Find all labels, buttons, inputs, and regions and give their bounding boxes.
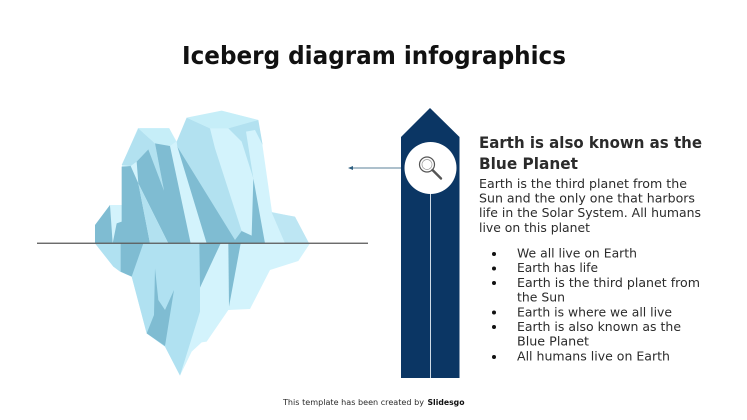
title: Iceberg diagram infographics (182, 41, 566, 70)
description text: live on this planet (479, 220, 590, 235)
bullet list: Blue Planet (517, 334, 589, 348)
footer credit: Slidesgo (428, 398, 465, 407)
bullet list: All humans live on Earth (517, 348, 670, 364)
heading (479, 133, 702, 173)
navy arrow banner (401, 108, 460, 378)
description text (479, 176, 701, 235)
iceberg below water (95, 243, 310, 376)
bullet list (492, 246, 700, 364)
bullet list: Earth is the third planet from (517, 275, 700, 290)
bullet list: the Sun (517, 290, 565, 304)
iceberg above water: base silhouette (95, 111, 309, 243)
bullet list: Earth is where we all live (517, 304, 672, 320)
bullet list: Earth is also known as the (517, 319, 681, 334)
description text: life in the Solar System. All humans (479, 205, 701, 220)
description text: Earth is the third planet from the (479, 176, 687, 191)
arrow connector (348, 166, 402, 170)
footer credit: This template has been created by (282, 398, 424, 407)
waterline (37, 243, 368, 244)
description text: Sun and the only one that harbors (479, 190, 695, 206)
heading: Earth is also known as the (479, 133, 702, 152)
right peak facets (177, 111, 309, 243)
left peak facets (95, 128, 191, 243)
bullet list: We all live on Earth (517, 246, 637, 260)
heading: Blue Planet (479, 154, 578, 173)
bullet list: Earth has life (517, 260, 598, 275)
iceberg diagram (37, 111, 368, 376)
icon: magnifying glass (420, 157, 441, 178)
